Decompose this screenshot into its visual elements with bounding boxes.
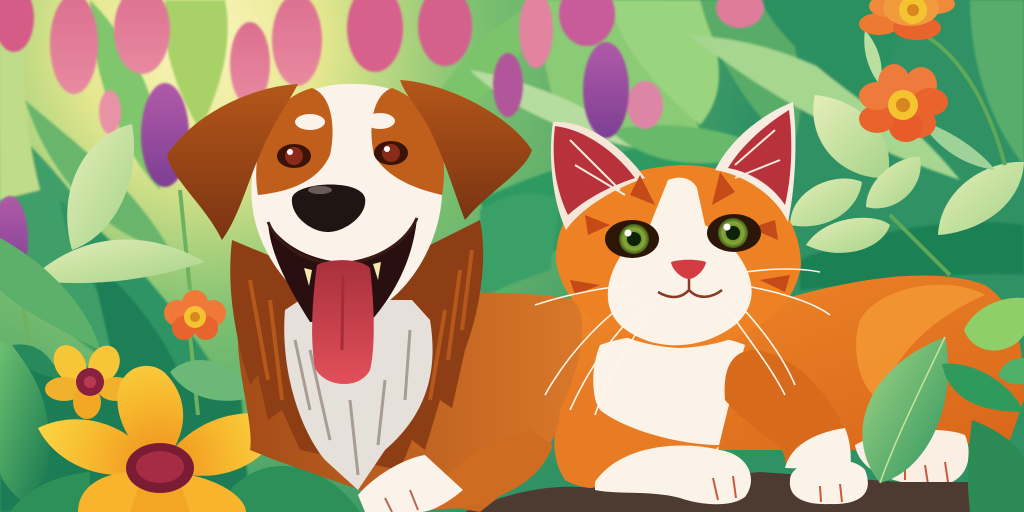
large yellow flower: bottom left xyxy=(38,366,287,512)
dog: white chest fur xyxy=(284,300,433,490)
foreground right leaves xyxy=(862,298,1024,512)
right plants: pale leaves xyxy=(790,30,1024,275)
cat: eyes xyxy=(605,220,659,258)
cat: white chest xyxy=(593,334,745,450)
cat: left ear xyxy=(551,122,645,230)
foreground left leaves xyxy=(0,124,360,512)
background flower spikes xyxy=(0,0,764,284)
dog: brow marks xyxy=(295,114,325,130)
dog: head brown patches xyxy=(256,88,333,195)
background flower stems xyxy=(20,190,198,415)
orange flower: right xyxy=(859,64,948,142)
dog: right ear xyxy=(400,80,532,220)
orange flower: top right xyxy=(859,0,955,40)
dog: neck fur strands xyxy=(250,250,472,400)
dog: nose xyxy=(292,184,365,232)
dog: body xyxy=(230,220,582,512)
cat: white leg sock xyxy=(785,428,851,470)
cat: front leg left xyxy=(554,370,720,490)
cat: nose and mouth xyxy=(671,260,706,279)
cat: right ear xyxy=(715,102,795,222)
cat: whiskers xyxy=(535,269,830,415)
small yellow flower: left xyxy=(45,339,134,419)
cat: front leg right xyxy=(725,350,849,462)
cat: head xyxy=(535,102,830,415)
cat: body xyxy=(554,276,1024,490)
ground xyxy=(465,472,990,512)
dog: eyes xyxy=(277,144,311,168)
dog: tongue xyxy=(312,260,374,384)
cat: white face xyxy=(608,178,752,345)
dog: front paw xyxy=(358,455,463,512)
dog: teeth xyxy=(304,262,381,286)
cat: rear white paw xyxy=(855,430,969,486)
small orange flower: left xyxy=(164,290,226,340)
dog: mouth xyxy=(268,218,417,322)
dog: brown neck fur xyxy=(230,220,483,470)
cat: front paws xyxy=(595,445,868,504)
dog: left ear xyxy=(167,84,298,240)
cat: forehead stripes xyxy=(570,172,790,295)
dog: head xyxy=(167,80,532,384)
